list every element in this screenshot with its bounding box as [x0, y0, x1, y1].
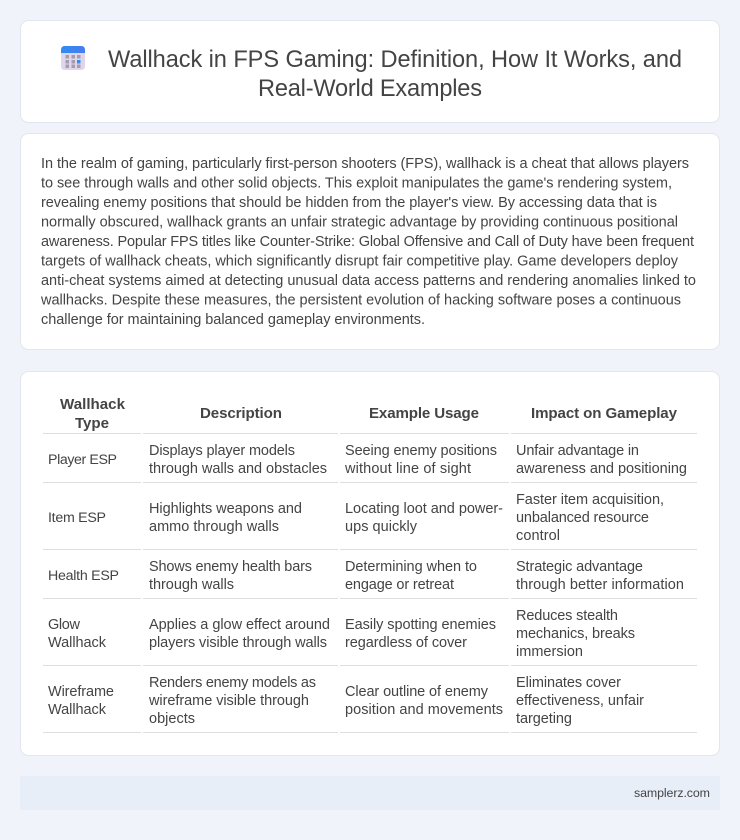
table row: Health ESP: Shows enemy health bars	[149, 559, 312, 575]
table row: Wireframe Wallhack: Wireframe	[48, 684, 114, 700]
text block: intro: normally obscured, wallhack grants an unfair strategic advantage by providing continuous positional	[41, 214, 678, 230]
text block: intro: awareness. Popular FPS titles like Counter-Strike: Global Offensive and Call of Duty have been frequent	[41, 234, 694, 250]
text block: intro: wallhacks. Despite these measures, the persistent evolution of hacking software poses a continuous	[40, 292, 681, 308]
table row: Wireframe Wallhack: objects	[149, 711, 195, 727]
table row: Wireframe Wallhack	[43, 675, 697, 733]
table row: Glow Wallhack: Reduces stealth	[516, 608, 618, 624]
table row: Wireframe Wallhack: wireframe visible through	[148, 693, 309, 709]
table header: Wallhack	[60, 396, 126, 413]
table row: Health ESP: through walls	[149, 577, 234, 593]
table row: Player ESP: Unfair advantage in	[516, 443, 639, 459]
panel: table card	[20, 372, 720, 756]
table row: Wireframe Wallhack: Eliminates cover	[516, 675, 621, 691]
text block: intro: anti-cheat systems aimed at detecting unusual data access patterns and rendering anomalies linked to	[41, 273, 696, 289]
table row: Glow Wallhack: Easily spotting enemies	[345, 617, 496, 633]
table row: Player ESP	[43, 443, 697, 483]
icon: calendar	[61, 46, 85, 70]
table row: Glow Wallhack: Applies a glow effect around	[149, 617, 330, 633]
title: Wallhack in FPS Gaming: Definition, How It Works, and	[108, 47, 682, 73]
table row: Wireframe Wallhack: Wallhack	[48, 702, 107, 718]
table row: Item ESP	[43, 492, 697, 550]
title: Real-World Examples	[258, 76, 482, 102]
table header: Impact on Gameplay	[531, 405, 678, 422]
text block: intro: targets of wallhack cheats, which significantly disrupt fair competitive play. Game developers deploy	[41, 254, 679, 270]
table row: Glow Wallhack: mechanics, breaks	[516, 626, 635, 642]
table row: Player ESP: Player ESP	[48, 452, 117, 468]
table row: Item ESP: Faster item acquisition,	[516, 492, 664, 508]
table row: Player ESP: through walls and obstacles	[149, 461, 327, 477]
footer credit: samplerz.com	[634, 786, 710, 800]
table row: Item ESP: ups quickly	[345, 519, 418, 535]
table row: Wireframe Wallhack: effectiveness, unfair	[516, 693, 644, 709]
table header	[43, 396, 697, 434]
table row: Wireframe Wallhack: targeting	[516, 711, 572, 727]
table row: Glow Wallhack: Wallhack	[48, 635, 107, 651]
text block: intro: to see through walls and other solid objects. This exploit manipulates the game's rendering system,	[41, 176, 672, 192]
table row: Wireframe Wallhack: position and movements	[345, 702, 503, 718]
table row: Health ESP	[43, 559, 697, 599]
table row: Wireframe Wallhack: Renders enemy models as	[149, 675, 316, 691]
table row: Health ESP: engage or retreat	[345, 577, 454, 593]
panel: title card	[20, 20, 720, 122]
title	[108, 47, 682, 102]
table header: Type	[75, 415, 109, 432]
table row: Health ESP: through better information	[516, 577, 684, 593]
table row: Glow Wallhack	[43, 608, 697, 666]
table row: Item ESP: unbalanced resource	[516, 510, 649, 526]
table row: Player ESP: awareness and positioning	[516, 461, 687, 477]
table row: Player ESP: Displays player models	[149, 443, 295, 459]
footer bar	[20, 776, 720, 810]
table row: Item ESP: ammo through walls	[149, 519, 279, 535]
table row: Health ESP: Strategic advantage	[516, 559, 643, 575]
table row: Item ESP: control	[516, 528, 560, 544]
table row: Glow Wallhack: regardless of cover	[345, 635, 467, 651]
table row: Item ESP: Highlights weapons and	[149, 501, 302, 517]
table row: Item ESP: Locating loot and power-	[345, 501, 503, 517]
table row: Player ESP: without line of sight	[344, 461, 471, 477]
table row: Health ESP: Determining when to	[345, 559, 477, 575]
table header: Description	[200, 405, 282, 422]
table row: Wireframe Wallhack: Clear outline of enemy	[345, 684, 489, 700]
text block: intro: revealing enemy positions that should be hidden from the player's view. By accessing data that is	[41, 195, 657, 211]
table row: Glow Wallhack: players visible through walls	[149, 635, 327, 651]
text block: intro	[40, 156, 696, 328]
panel: intro paragraph	[20, 134, 720, 350]
table header: Example Usage	[369, 405, 479, 422]
table row: Glow Wallhack: Glow	[48, 617, 81, 633]
text block: intro: In the realm of gaming, particularly first-person shooters (FPS), wallhack is a cheat that allows players	[41, 156, 689, 172]
table row: Glow Wallhack: immersion	[516, 644, 583, 660]
table row: Player ESP: Seeing enemy positions	[345, 443, 497, 459]
table row: Item ESP: Item ESP	[48, 510, 106, 526]
table row: Health ESP: Health ESP	[48, 568, 119, 584]
text block: intro: challenge for maintaining balanced gameplay environments.	[41, 312, 425, 328]
